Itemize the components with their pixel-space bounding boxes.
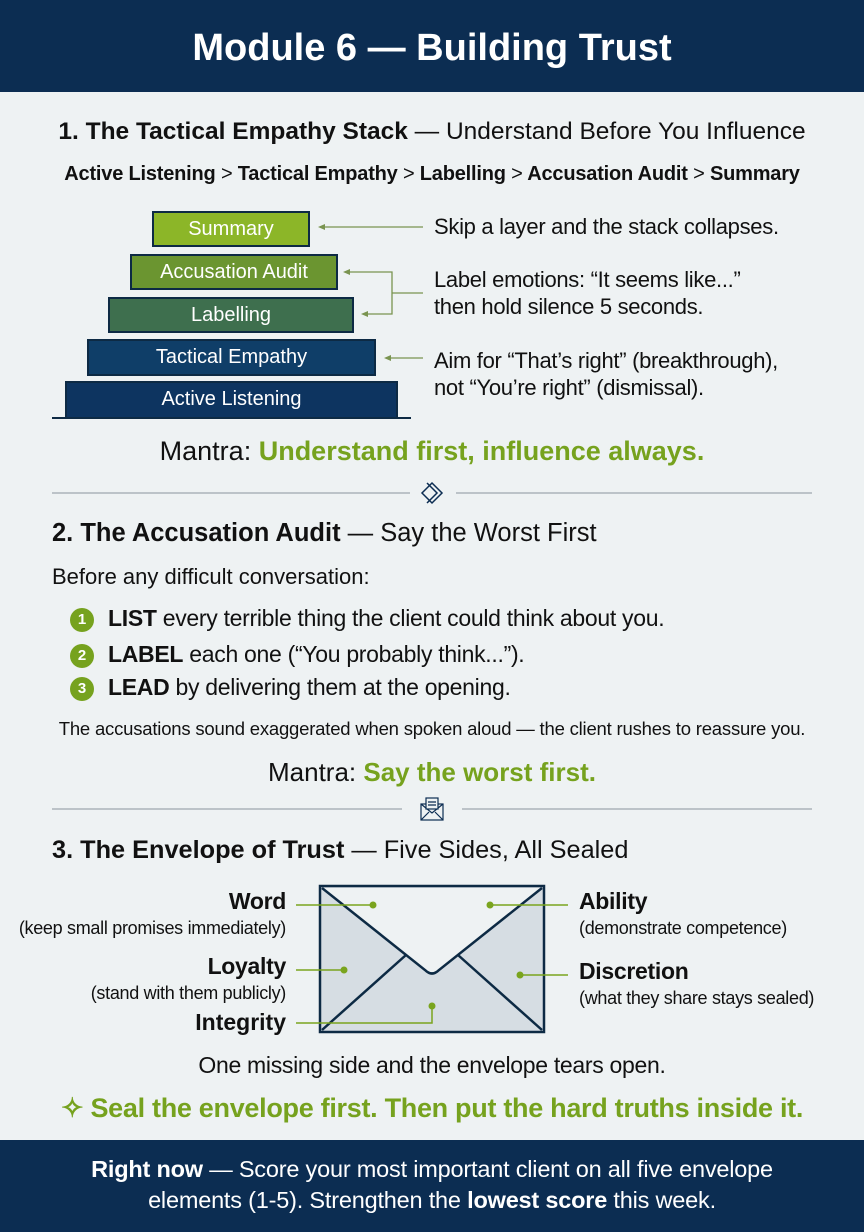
label: discretion: Discretion bbox=[579, 958, 688, 984]
label: discretion bbox=[579, 958, 814, 1008]
envelope diagram bbox=[296, 884, 568, 1034]
steps list: LEAD by delivering them at the opening. bbox=[108, 674, 511, 700]
steps list: LIST every terrible thing the client could think about you. bbox=[108, 605, 664, 631]
layer: summary: Summary bbox=[188, 218, 274, 240]
layer: summary bbox=[152, 211, 310, 247]
callout: ✧ Seal the envelope first. Then put the hard truths inside it. bbox=[61, 1093, 803, 1123]
label: ability: Ability bbox=[579, 888, 647, 914]
label: word bbox=[19, 888, 286, 938]
label: ability bbox=[579, 888, 787, 938]
footer bbox=[0, 1140, 864, 1232]
mantra 2: Mantra: Say the worst first. bbox=[268, 757, 596, 787]
text: then hold silence 5 seconds. bbox=[434, 294, 703, 319]
steps list: 1 bbox=[78, 611, 86, 628]
footer: Right now — Score your most important client on all five envelope bbox=[91, 1156, 773, 1182]
layer: accusation audit: Accusation Audit bbox=[160, 261, 308, 283]
sequence line: Active Listening > Tactical Empathy > Labelling > Accusation Audit > Summary bbox=[64, 163, 800, 185]
label: word: (keep small promises immediately) bbox=[19, 918, 286, 938]
stack diagram bbox=[52, 211, 411, 419]
intro: Before any difficult conversation: bbox=[52, 564, 370, 589]
note: The accusations sound exaggerated when spoken aloud — the client rushes to reassure you. bbox=[59, 718, 805, 739]
header bbox=[0, 0, 864, 92]
label: loyalty: Loyalty bbox=[208, 953, 286, 979]
heading 2: 2. The Accusation Audit — Say the Worst First bbox=[52, 519, 597, 547]
layer: labelling: Labelling bbox=[191, 304, 271, 326]
arrows bbox=[318, 224, 423, 361]
text: Label emotions: “It seems like...” bbox=[434, 267, 740, 292]
notes: Skip a layer and the stack collapses. bbox=[434, 214, 779, 239]
text: not “You’re right” (dismissal). bbox=[434, 375, 704, 400]
label: word: Word bbox=[229, 888, 286, 914]
label: ability: (demonstrate competence) bbox=[579, 918, 787, 938]
label: loyalty bbox=[91, 953, 286, 1003]
label: loyalty: (stand with them publicly) bbox=[91, 983, 286, 1003]
steps list: 2 bbox=[78, 647, 86, 664]
divider 2 with envelope icon bbox=[52, 797, 812, 821]
divider 1 bbox=[52, 482, 812, 504]
header: Module 6 — Building Trust bbox=[192, 27, 672, 69]
layer: tactical empathy bbox=[87, 339, 376, 376]
layer: labelling bbox=[108, 297, 354, 333]
footer: elements (1-5). Strengthen the lowest score this week. bbox=[148, 1187, 716, 1213]
steps list bbox=[70, 605, 664, 701]
layer: active listening: Active Listening bbox=[161, 388, 302, 410]
heading 3: 3. The Envelope of Trust — Five Sides, All Sealed bbox=[52, 836, 628, 864]
label: discretion: (what they share stays sealed) bbox=[579, 988, 814, 1008]
layer: tactical empathy: Tactical Empathy bbox=[156, 346, 307, 368]
envelope note: One missing side and the envelope tears open. bbox=[198, 1052, 666, 1078]
heading 1: 1. The Tactical Empathy Stack — Understand Before You Influence bbox=[58, 118, 806, 145]
steps list: 3 bbox=[78, 680, 86, 697]
layer: active listening bbox=[65, 381, 398, 418]
mantra 1: Mantra: Understand first, influence always. bbox=[160, 436, 704, 466]
steps list: LABEL each one (“You probably think...”). bbox=[108, 641, 524, 667]
label: integrity: Integrity bbox=[195, 1009, 286, 1035]
text: Aim for “That’s right” (breakthrough), bbox=[434, 348, 778, 373]
layer: accusation audit bbox=[130, 254, 338, 290]
